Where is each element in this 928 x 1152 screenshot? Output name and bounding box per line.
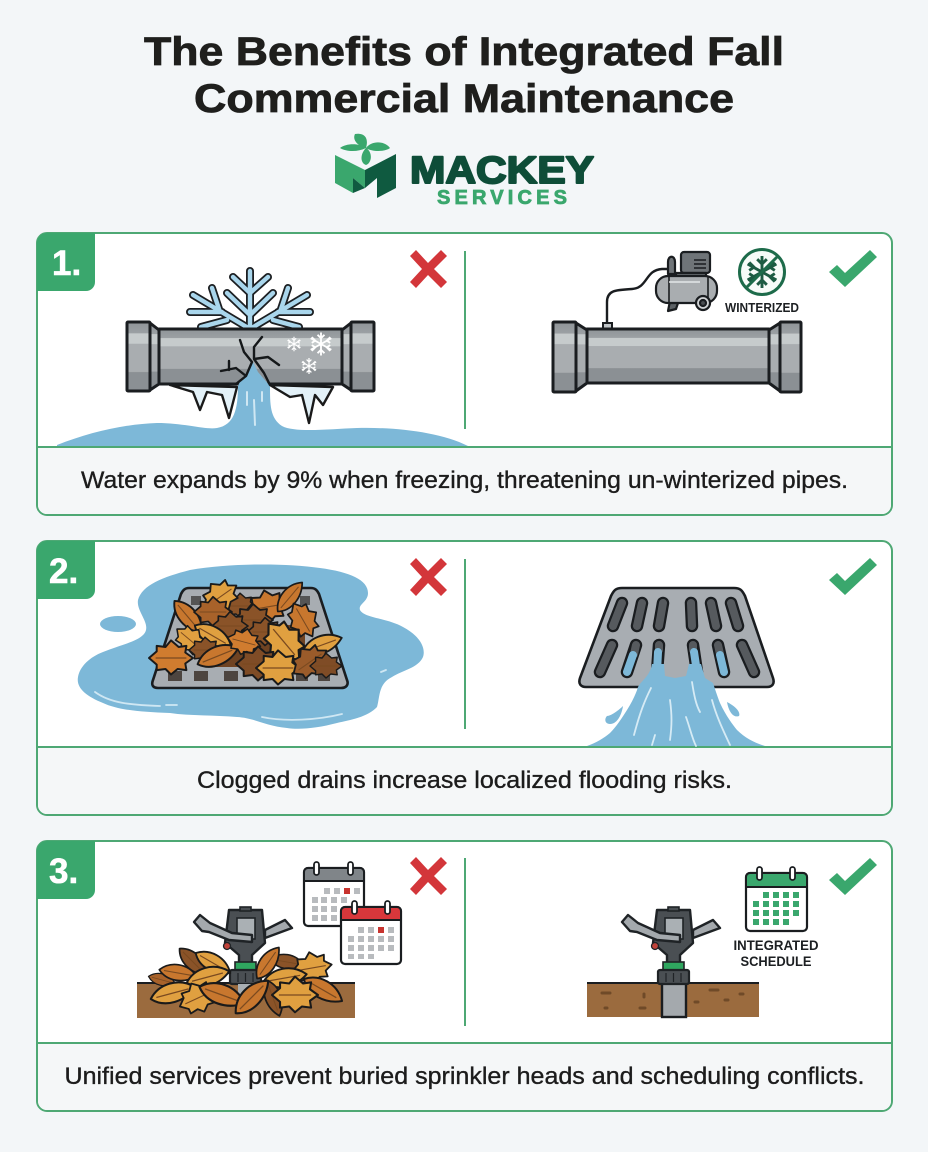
soil [587, 983, 759, 1017]
sprinkler [194, 907, 292, 984]
caption band [38, 447, 891, 514]
illustration: winterized pipe [553, 250, 801, 392]
leaf pile [147, 943, 347, 1020]
water streaks [247, 392, 262, 425]
title: The Benefits of Integrated Fall [144, 30, 784, 74]
illustration: clear sprinkler [587, 867, 818, 1017]
integrated schedule label [734, 937, 818, 969]
illustration: clogged drain [78, 564, 424, 729]
number badge 2 [37, 541, 95, 599]
icon: green check [829, 858, 877, 895]
panel 3: sprinklers [37, 841, 892, 1111]
icon: red x [410, 558, 447, 596]
caption 3: Unified services prevent buried sprinkler heads and scheduling conflicts. [64, 1063, 864, 1090]
puddle highlights [95, 670, 386, 720]
wordmark: MACKEY [410, 150, 594, 192]
tagline: SERVICES [437, 187, 567, 209]
caption 2: Clogged drains increase localized flooding risks. [197, 767, 732, 794]
integrated schedule label: INTEGRATED [734, 937, 818, 953]
panel 1: pipes [37, 233, 892, 515]
divider [464, 559, 466, 729]
icon: green check [829, 558, 877, 595]
illustration: buried sprinkler [137, 862, 401, 1020]
icon: red x [410, 857, 447, 895]
red calendar [341, 901, 401, 964]
cracks [221, 337, 279, 385]
sprinkler [622, 907, 720, 984]
icon: red x [410, 250, 447, 288]
title [144, 30, 784, 121]
water flow [587, 664, 765, 746]
icon: fan and cube [335, 134, 396, 198]
number badge 3 [37, 841, 95, 899]
number badge 3: 3. [49, 852, 78, 891]
riser [238, 984, 253, 996]
number badge 2: 2. [49, 552, 78, 591]
illustration: frozen cracked pipe [57, 271, 468, 446]
water puddle and stream [57, 365, 468, 446]
caption 1: Water expands by 9% when freezing, threatening un-winterized pipes. [81, 467, 848, 494]
snowflake [190, 271, 310, 330]
divider [464, 858, 466, 1026]
winterized badge [725, 250, 799, 315]
small puddle [100, 616, 136, 632]
conflicting calendars [304, 862, 401, 964]
panel frame [37, 841, 892, 1111]
panel frame [37, 233, 892, 515]
winterized badge: WINTERIZED [725, 301, 799, 315]
integrated calendar [746, 867, 807, 931]
soil [137, 983, 355, 1018]
water streaks and splashes [634, 682, 730, 746]
water through crack [238, 362, 270, 395]
panel frame [37, 541, 892, 815]
pipe [127, 322, 374, 391]
title: Commercial Maintenance [194, 77, 734, 121]
logo: Mackey Services [335, 134, 594, 209]
frost flakes [288, 337, 300, 351]
slots [600, 603, 754, 672]
icon: green check [829, 250, 877, 287]
fitting and air hose [607, 269, 667, 323]
grate [152, 588, 348, 688]
number badge 1 [37, 233, 95, 291]
divider [464, 251, 466, 429]
integrated schedule label: SCHEDULE [740, 953, 812, 969]
leaves [149, 572, 345, 686]
riser [662, 983, 686, 1017]
caption band [38, 1043, 891, 1110]
puddle [78, 564, 424, 729]
icicles [170, 385, 333, 423]
gray calendar [304, 862, 364, 926]
grate [579, 588, 774, 687]
caption band [38, 747, 891, 814]
panel 2: drains [37, 541, 892, 815]
illustration: clear drain [579, 588, 774, 746]
number badge 1: 1. [52, 244, 81, 283]
compressor [656, 252, 717, 311]
pipe [553, 322, 801, 392]
